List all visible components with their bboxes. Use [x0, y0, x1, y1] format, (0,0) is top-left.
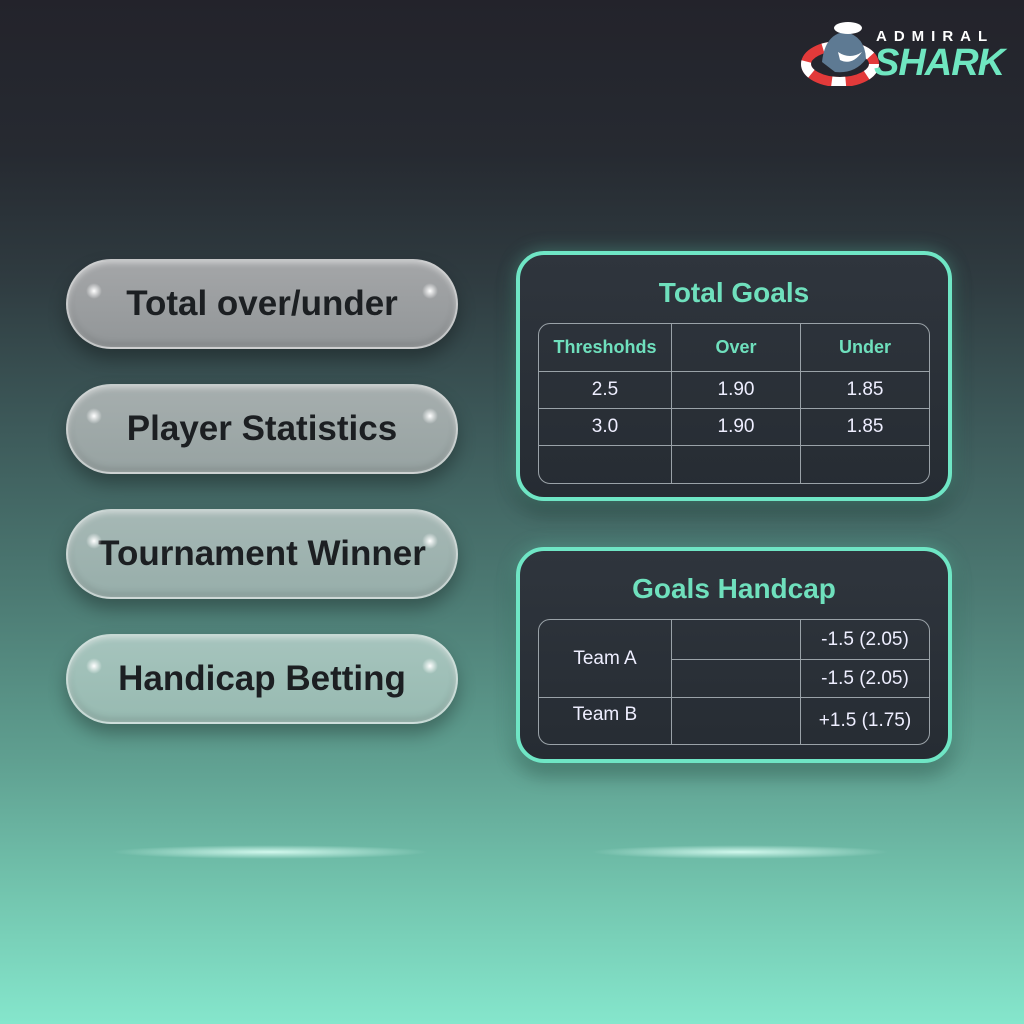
glow: right	[590, 845, 890, 859]
table: total goals odds: 1.85	[846, 379, 883, 400]
panel: goals handicap	[516, 547, 952, 763]
table: total goals odds: 1.90	[718, 379, 754, 400]
table: total goals odds	[538, 323, 930, 484]
pill: player statistics: Player Statistics	[127, 409, 397, 448]
table: handicap odds	[538, 619, 930, 745]
pill: handicap betting: Handicap Betting	[118, 659, 406, 698]
heading: goals handicap: Goals Handcap	[632, 573, 836, 604]
pill: total over/under: Total over/under	[126, 284, 398, 323]
pill: tournament winner	[66, 509, 458, 599]
glow: left	[110, 845, 430, 859]
table: handicap odds: -1.5 (2.05)	[821, 628, 909, 650]
table: total goals odds: 1.85	[846, 416, 883, 437]
pill: player statistics	[66, 384, 458, 474]
table: handicap odds: -1.5 (2.05)	[821, 668, 909, 688]
logo: admiral shark: SHARK	[874, 42, 1004, 84]
panel: total goals	[516, 251, 952, 501]
table: total goals odds: Threshohds	[553, 337, 656, 357]
logo: admiral shark	[801, 22, 1008, 86]
pill: total over/under	[66, 259, 458, 349]
table: total goals odds: Under	[839, 337, 891, 357]
table: total goals odds: Over	[715, 337, 757, 357]
icon: shark in lifebuoy	[801, 22, 879, 86]
heading: total goals: Total Goals	[659, 277, 809, 308]
logo text: ADMIRAL	[876, 28, 994, 45]
table: handicap odds: Team B	[573, 704, 637, 725]
table: handicap odds: Team A	[573, 648, 637, 668]
table: handicap odds: +1.5 (1.75)	[819, 710, 911, 731]
table: total goals odds: 1.90	[718, 416, 754, 437]
table: total goals odds: 2.5	[592, 379, 618, 400]
table: total goals odds: 3.0	[592, 416, 618, 437]
pill: tournament winner: Tournament Winner	[98, 534, 426, 573]
pill: handicap betting	[66, 634, 458, 724]
